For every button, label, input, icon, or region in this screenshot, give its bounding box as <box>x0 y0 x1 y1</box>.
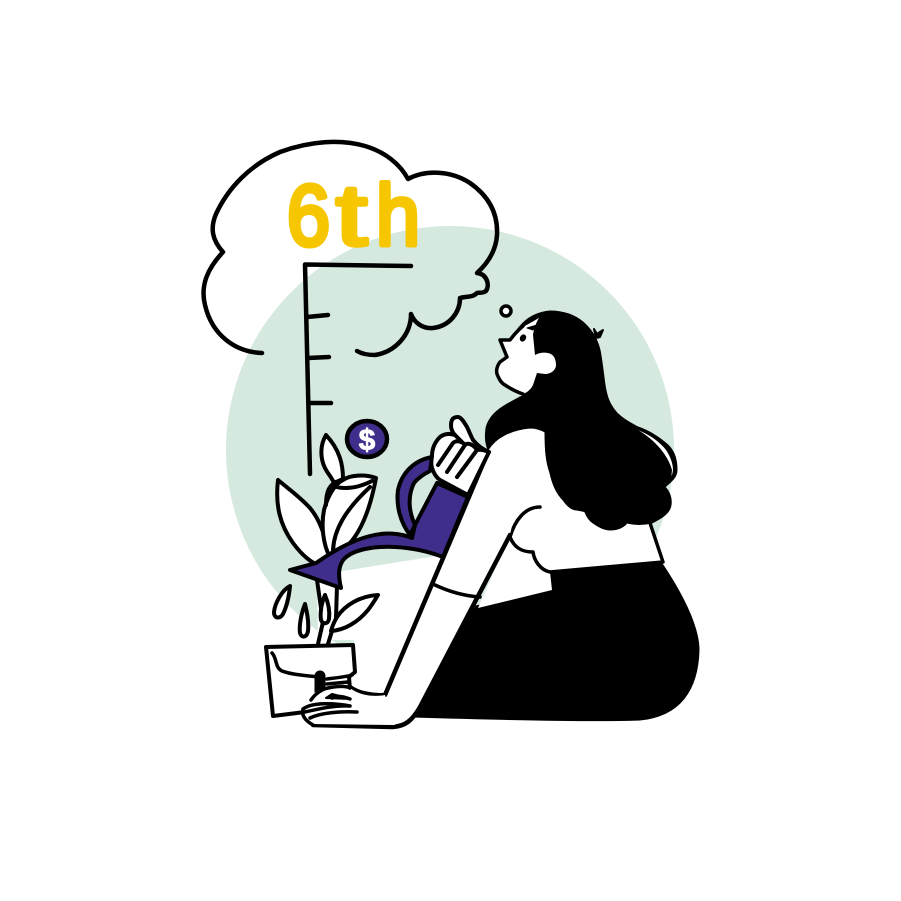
torso <box>432 428 663 608</box>
plant leaf left <box>277 480 329 566</box>
watering can <box>290 457 468 588</box>
heading: 6th: h <box>376 167 420 264</box>
heading: 6th: t <box>336 168 367 264</box>
face <box>497 318 556 394</box>
can body and spout <box>290 483 468 588</box>
thumb on pot <box>314 676 326 692</box>
can handle <box>398 457 432 535</box>
thought bubble small <box>501 306 511 316</box>
arm <box>302 432 530 727</box>
eye <box>519 333 527 343</box>
flower pot <box>266 645 355 716</box>
hair <box>485 311 677 530</box>
chart axis: ruler with ticks <box>305 264 411 474</box>
knee white area <box>318 555 443 695</box>
plant leaf low <box>331 595 378 631</box>
water drops <box>274 586 329 637</box>
sleeve line <box>435 585 480 597</box>
icon: dollar coin: $ <box>359 424 376 457</box>
plant leaf top <box>321 435 343 483</box>
thought cloud <box>204 142 497 355</box>
hand on watering can <box>431 417 489 495</box>
hair knot <box>594 329 603 338</box>
heading: 6th <box>287 167 420 264</box>
skirt <box>412 562 699 721</box>
stem <box>317 580 337 644</box>
icon: dollar coin <box>347 421 387 457</box>
hair highlight <box>638 430 673 476</box>
plant bud <box>323 476 376 557</box>
background circle <box>226 226 674 674</box>
heading: 6th: 6 <box>287 168 330 264</box>
hand on pot <box>302 686 395 725</box>
plant <box>277 435 378 644</box>
